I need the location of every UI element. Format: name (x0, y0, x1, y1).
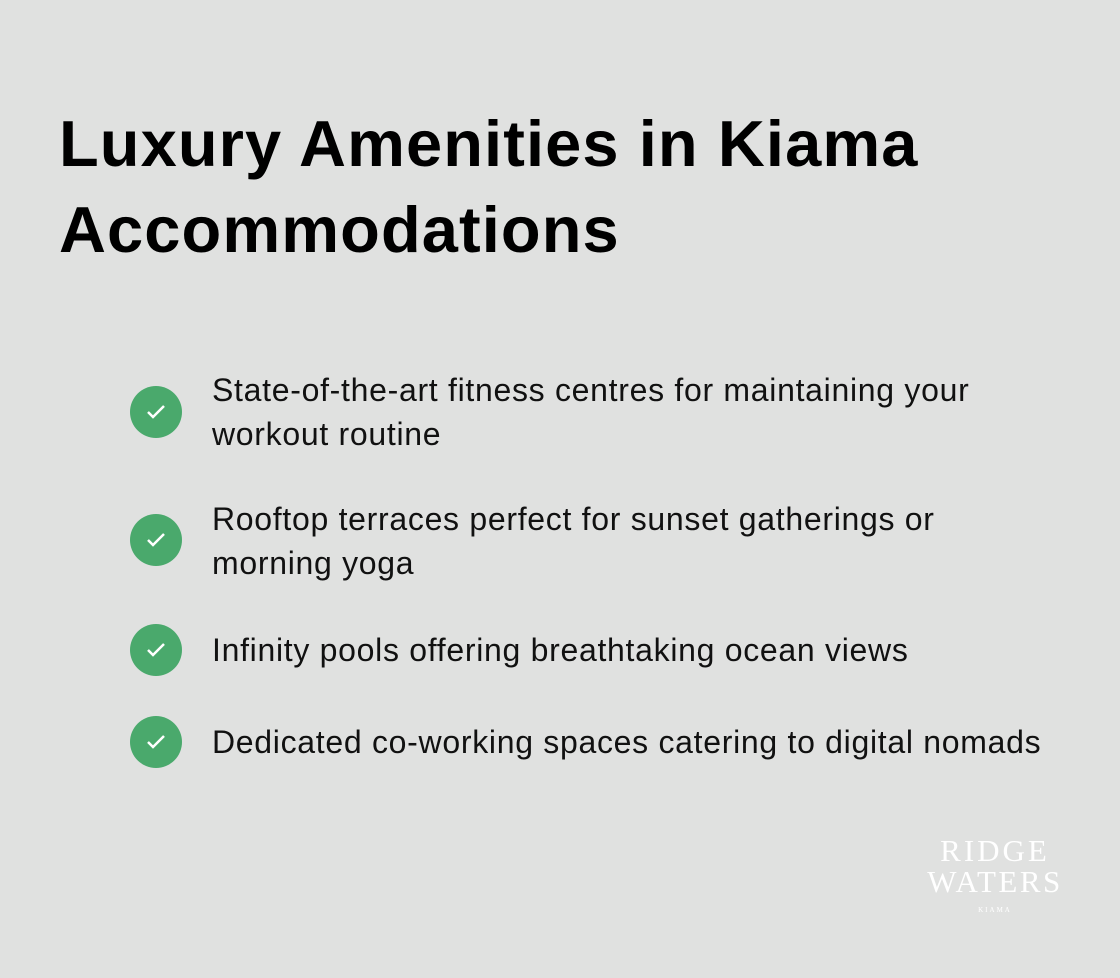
item 4 (130, 716, 1041, 768)
item 2 (130, 501, 935, 581)
text (212, 372, 969, 452)
icon: check (130, 624, 182, 676)
logo: RIDGE (940, 833, 1050, 868)
text: State-of-the-art fitness centres for maintaining your (212, 372, 969, 408)
text: morning yoga (212, 545, 414, 581)
icon: check (130, 386, 182, 438)
logo: WATERS (927, 864, 1063, 899)
logo: KIAMA (978, 906, 1012, 914)
text: workout routine (212, 416, 441, 452)
icon: check (130, 514, 182, 566)
text: Infinity pools offering breathtaking ocean views (212, 632, 909, 668)
item 1 (130, 372, 969, 452)
title: Luxury Amenities in Kiama (59, 107, 918, 180)
text (212, 501, 935, 581)
text: Rooftop terraces perfect for sunset gatherings or (212, 501, 935, 537)
title (59, 107, 918, 266)
item 3 (130, 624, 909, 676)
logo (927, 833, 1063, 914)
text: Dedicated co-working spaces catering to digital nomads (212, 724, 1041, 760)
icon: check (130, 716, 182, 768)
title: Accommodations (59, 193, 620, 266)
